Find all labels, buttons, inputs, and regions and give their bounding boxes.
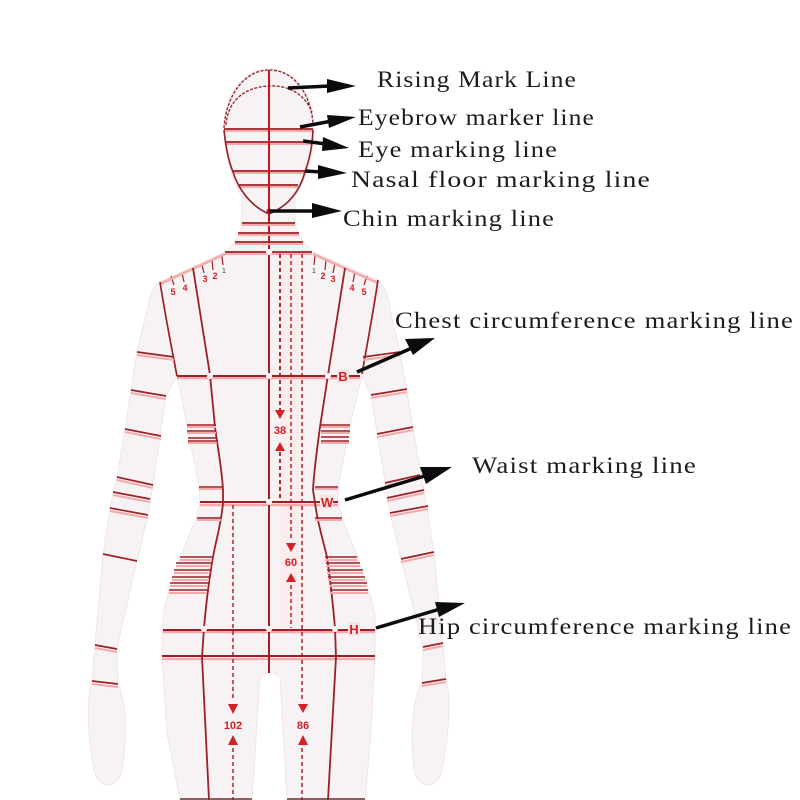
measurement 38: 38 [274, 425, 286, 437]
letter markers [320, 369, 360, 637]
measurement 102 [224, 704, 242, 745]
side hatch lines [169, 425, 368, 593]
shoulder scale ticks: 1 [312, 268, 316, 275]
measurement 60: 60 [285, 557, 297, 569]
label: waist marking line: Waist marking line [472, 453, 697, 478]
label: rising mark line [288, 67, 577, 93]
label: eye marking line: Eye marking line [358, 137, 558, 162]
label: hip circumference marking line [376, 602, 792, 639]
shoulder scale ticks: 2 [212, 271, 218, 281]
shoulder scale ticks: 5 [170, 287, 176, 297]
dashed measurement lines [233, 254, 302, 800]
bottom edge of legs [180, 798, 365, 800]
shoulder scale ticks [170, 256, 367, 297]
construction lines [160, 252, 378, 800]
body silhouette [88, 69, 449, 800]
pale measuring band [280, 254, 303, 628]
arm markings [92, 352, 446, 687]
intersection points [201, 249, 338, 632]
label: nasal floor marking line: Nasal floor marking line [351, 167, 651, 192]
neck markings [225, 223, 312, 254]
label: rising mark line: Rising Mark Line [377, 67, 577, 92]
measurement 38 [274, 410, 286, 451]
shoulder scale ticks: 5 [361, 287, 367, 297]
shoulder scale ticks: 1 [222, 268, 226, 275]
label: waist marking line [345, 453, 697, 500]
measurement 86 [297, 704, 309, 745]
mannequin figure [88, 69, 449, 800]
measurement 102: 102 [224, 720, 242, 732]
label: chest circumference marking line [357, 308, 794, 372]
letter markers: H [349, 622, 359, 637]
shoulder scale ticks: 4 [349, 283, 355, 293]
shoulder scale ticks: 4 [182, 283, 188, 293]
label: eye marking line [303, 137, 558, 162]
label: chest circumference marking line: Chest circumference marking line [395, 308, 794, 333]
shoulder scale ticks: 3 [202, 274, 208, 284]
label: eyebrow marker line: Eyebrow marker line [358, 105, 595, 130]
label: hip circumference marking line: Hip circumference marking line [418, 614, 792, 639]
letter markers: B [338, 369, 348, 384]
shoulder scale ticks: 3 [330, 274, 336, 284]
head markings [224, 70, 313, 250]
label: chin marking line [269, 203, 555, 231]
measurement 60 [285, 543, 297, 582]
shoulder scale ticks: 2 [320, 271, 326, 281]
label: nasal floor marking line [305, 165, 651, 192]
label: chin marking line: Chin marking line [343, 206, 555, 231]
letter markers: W [321, 495, 334, 510]
measurement 86: 86 [297, 720, 309, 732]
